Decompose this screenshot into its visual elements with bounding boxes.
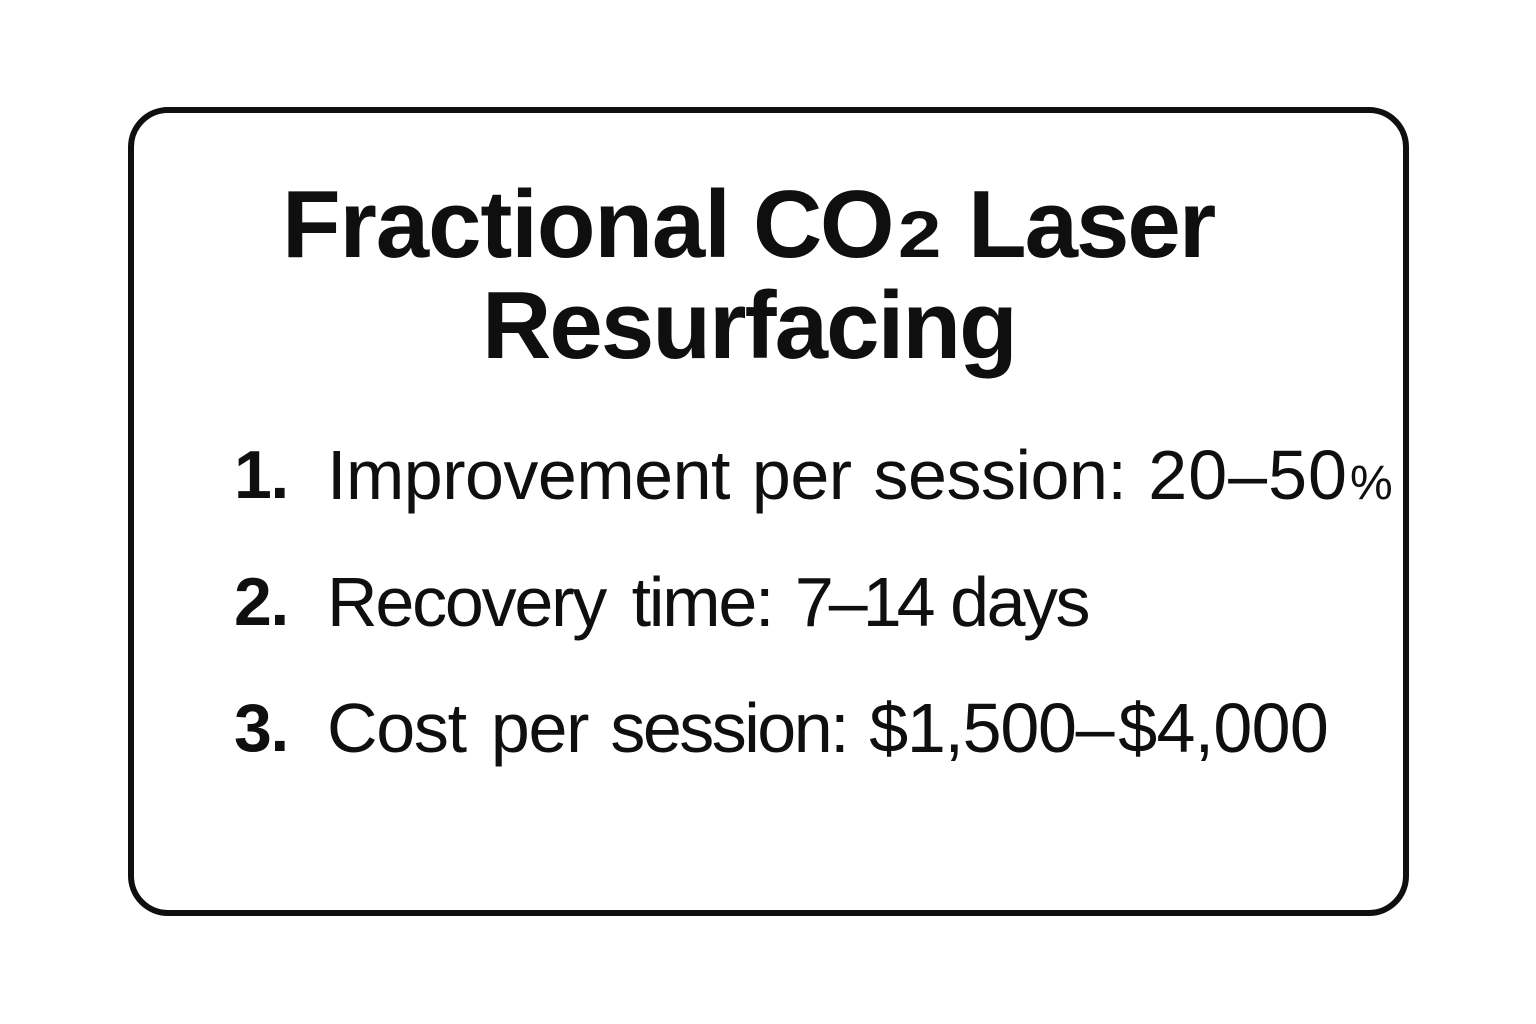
panel: rounded card	[128, 107, 1409, 916]
title word: Fractional: Fractional	[282, 171, 730, 278]
number 3: 3.	[234, 690, 288, 766]
title word: Laser: Laser	[968, 171, 1214, 278]
title word: CO2: CO	[753, 171, 892, 278]
list item 1	[234, 436, 1393, 514]
text 2: Recovery time: 7–14 days	[327, 563, 1088, 641]
text 3: Cost per session: $1,500–$4,000	[327, 689, 1328, 767]
number 1: 1.	[234, 437, 288, 513]
title word: CO2: 2	[898, 197, 941, 271]
list item 2	[234, 563, 1088, 641]
number 2: 2.	[234, 564, 288, 640]
list item 3	[234, 689, 1328, 767]
title line 2: Resurfacing	[482, 272, 1016, 379]
title	[282, 171, 1215, 379]
text 1: Improvement per session: 20–50%	[327, 436, 1393, 514]
